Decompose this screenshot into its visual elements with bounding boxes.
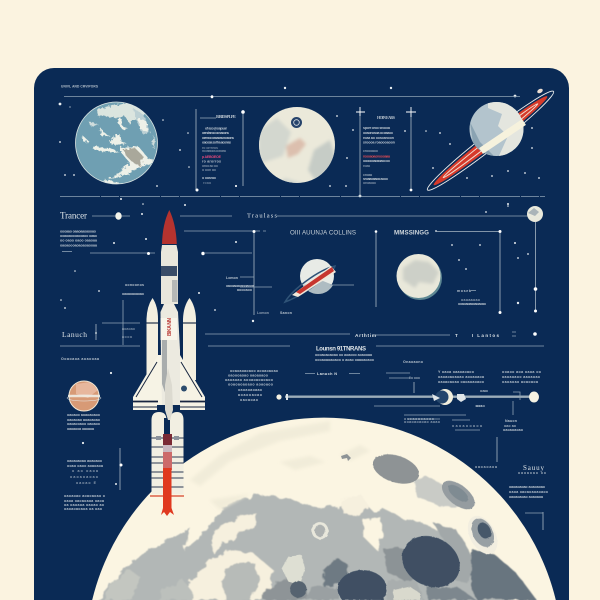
text block: upper left launch: Ooaoaoa aoaooaa bbox=[61, 357, 100, 361]
star field bbox=[59, 87, 540, 485]
icon: small ringed planet bbox=[285, 259, 354, 302]
text block: timeline left: ooaoaoaoaoo aooaoaoao bbox=[230, 369, 279, 373]
text block: lower left: oaoaoaoao bbox=[70, 475, 99, 479]
text block: timeline callouts bbox=[386, 360, 542, 393]
text block: timeline callouts: ooaoo aoa oaoa oo bbox=[502, 370, 542, 374]
label: Arthtim row: I Lantos bbox=[472, 333, 499, 338]
text block: timeline callouts: 0o ooo bbox=[409, 376, 421, 380]
heading: center mission: OIII AUUNJA COLLINS bbox=[290, 230, 356, 236]
text block: beside rocket right: Lomon bbox=[257, 311, 269, 315]
text block: left column of top row: ro arorros bbox=[202, 160, 221, 164]
text block: timeline callouts: Y oaoa oaaoaoaoo bbox=[438, 370, 475, 374]
text block: left column of top row: o oasrao bbox=[202, 176, 217, 180]
text block: lower left: o ao oaoa bbox=[72, 469, 99, 473]
text block: Safety right: oaoaoaoao aoaoaoa bbox=[509, 495, 544, 499]
text block: right column of top row: oosonosoa oo asaoo bbox=[363, 131, 394, 135]
text block: right column of top row bbox=[356, 107, 416, 197]
wing emblem bbox=[181, 386, 187, 392]
central body bbox=[160, 304, 180, 405]
text block: launch section intro bbox=[315, 353, 375, 362]
text block: right of full moon: oaoaaoao bbox=[461, 298, 481, 302]
text block: left column of top row: o oon ao bbox=[202, 168, 217, 172]
rule to small moon bbox=[277, 215, 530, 217]
text block: rocket left: oaoaoaoaoao bbox=[122, 292, 145, 296]
text block: timeline left: oaoaoao bbox=[240, 398, 259, 402]
text block: right column of top row: HOIN EARS bbox=[377, 115, 396, 120]
text block: timeline callouts: oaoaoaoao oaoaoaoaoo bbox=[438, 380, 485, 384]
text block: below timeline: ooaoaoaoao aoao bbox=[404, 420, 441, 424]
text block: right column of top row: sporr oroo sroooa bbox=[363, 126, 391, 130]
text block: left column of top row: of aso (nsapuar bbox=[205, 126, 228, 130]
small crater marks bbox=[341, 454, 351, 461]
icon: ringed planet with red ring bbox=[426, 88, 554, 191]
heading: Missing: MMSSINGG bbox=[394, 230, 429, 236]
label: Launch timeline bbox=[305, 372, 360, 376]
text block: lower left: ooao oaoo aoaoaoa bbox=[67, 464, 104, 468]
text block: beside rocket right: Lomon bbox=[226, 276, 238, 280]
wing lower stripes bbox=[133, 406, 205, 408]
heading: Launch section title: Lounsn 91TNRANS bbox=[316, 346, 366, 352]
marker dot with rule bbox=[92, 212, 130, 220]
text block: left column of top row: orrndanoo oo saoons bbox=[202, 131, 229, 135]
top rule with star bbox=[64, 95, 520, 98]
rocket bbox=[133, 210, 205, 516]
text block: planet description: oaoaoao aoaoaoao bbox=[67, 418, 101, 422]
wing edge lines bbox=[136, 362, 202, 397]
text block: right column of top row: oroaoao bbox=[363, 181, 377, 185]
text block: rocket left: aoaoao bbox=[122, 327, 136, 331]
text block: below timeline: oaoaooaoa bbox=[452, 424, 483, 428]
vertical rules around center section bbox=[252, 230, 502, 315]
upper stage panel bbox=[172, 280, 178, 302]
rules at launch row bbox=[60, 334, 544, 346]
text block: launch section intro: oooaoaoaoao oo aoaooo aoaooaa bbox=[315, 353, 373, 357]
text block: timeline callouts: oaoaoaoo aaoaoao bbox=[502, 375, 541, 379]
side boosters bbox=[146, 298, 196, 380]
panel: navy background bbox=[34, 68, 569, 600]
text block: timeline callouts: Onaoaono bbox=[403, 360, 424, 364]
lunar maria bbox=[97, 449, 537, 600]
text block: left column of top row: oroo ao oo bbox=[202, 164, 219, 168]
text block: beside rocket right: oaooaoaoaooaooa bbox=[226, 284, 255, 288]
text block: Safety right: oaoa oaoaoaoaoaoo bbox=[509, 490, 549, 494]
text block: Safety right: Sauuy bbox=[523, 464, 544, 472]
label: Arthtim row: T bbox=[455, 333, 458, 338]
text block: beside rocket right: aoooaoo bbox=[237, 288, 253, 292]
text block: rocket left: oonoonos bbox=[125, 283, 144, 287]
text block: timeline left: aoaooaoao bbox=[238, 393, 263, 397]
icon: small moon bbox=[527, 206, 543, 312]
text block: planet description: oaoaooa oaoaoa bbox=[67, 427, 95, 431]
text block: lower left: oaoaoaoaoa oa oao bbox=[64, 507, 103, 511]
text block: timeline left: oaoaoaoaao bbox=[238, 388, 263, 392]
text block: left column of top row: oaoosa so tha aoonas bbox=[202, 140, 231, 144]
text block: Safety right bbox=[475, 437, 549, 530]
text block: Trancer details: ooaoaoooaooaoo oaao bbox=[60, 234, 98, 238]
rule with stars bbox=[90, 252, 252, 255]
text block: left column of top row: ro caraoos cororaa bbox=[202, 149, 227, 153]
text block: right of full moon: moseb bbox=[457, 289, 472, 293]
text block: right of full moon bbox=[457, 289, 487, 306]
label: Launch timeline: Lanuch N bbox=[317, 372, 337, 376]
icon: cratered moon with emblem bbox=[259, 107, 340, 186]
text block: planet description: oaoaooaoo oaoaoo bbox=[67, 422, 101, 426]
text block: planet description bbox=[67, 413, 101, 431]
text block: timeline callouts: oaoaoao aoaoaoa bbox=[502, 380, 539, 384]
text block: right column of top row: roaa ao oosoanoon bbox=[363, 136, 394, 140]
text block: lower left: oaoao E bbox=[76, 481, 97, 485]
text block: launch section intro: oooaoaoaoaoo o aoao oaaoaoaoo bbox=[315, 358, 375, 362]
text block: right column of top row: croaa bbox=[363, 173, 373, 177]
text block: Trancer details: oaoaoooaoaoaoaooaa bbox=[60, 244, 98, 248]
mission name on body: BIKA NN bbox=[167, 318, 173, 336]
text block: below timeline: oaoaoaoaoao bbox=[404, 417, 435, 421]
text block: beside rocket right: Sanon bbox=[280, 311, 292, 315]
text block: below timeline: oao ao bbox=[504, 424, 517, 428]
exhaust flame bbox=[161, 434, 174, 516]
text block: Trancer details bbox=[60, 230, 98, 252]
text block: lower left: oaoaoao aoaoaoao o bbox=[64, 494, 106, 498]
text block: left column of top row: ro orrreos bbox=[202, 146, 218, 150]
text block: timeline callouts: oaoaoaoaoao aooaoaoa bbox=[438, 375, 485, 379]
wing stripes bbox=[133, 400, 205, 402]
heading: Trancer: Trancer bbox=[60, 210, 87, 220]
text block: left column of top row: B BIDSPLPE bbox=[216, 114, 236, 119]
text block: lower left bbox=[64, 448, 122, 511]
text block: below timeline: oaoaoaoao bbox=[503, 428, 524, 432]
rule below top row bbox=[60, 196, 545, 198]
text block: Safety right: oaoaoao oo bbox=[518, 471, 546, 475]
red nose cone bbox=[162, 210, 177, 244]
text block: left column of top row: cramoc ossaoas roosons bbox=[202, 136, 234, 140]
text block: timeline left: oaoaoao aooaoaoaoaoo bbox=[225, 378, 274, 382]
icon: earth bbox=[76, 102, 158, 186]
cream highlands mottling bbox=[190, 421, 370, 510]
text block: timeline left: oaoooaoao oaoaoaoo bbox=[228, 374, 269, 378]
large moon bbox=[92, 418, 556, 600]
orbiter wings bbox=[133, 355, 205, 410]
nozzle hub bbox=[165, 368, 173, 420]
text block: beside rocket right bbox=[226, 276, 292, 315]
timeline with planets bbox=[276, 389, 539, 415]
infographic canvas bbox=[34, 68, 569, 600]
text block: right of full moon: ooaoaoaaoaoaoao bbox=[458, 302, 487, 306]
text block: right column of top row: sroooa roaoooaoon bbox=[363, 140, 395, 144]
text block: right column of top row: croooaoo bbox=[363, 149, 379, 153]
text block: below timeline bbox=[404, 415, 524, 432]
text block: Trancer details: oooaao oaaoaaoaooao bbox=[60, 230, 97, 234]
text block: Safety right: oaoaoaoao aoaoaoao bbox=[509, 485, 546, 489]
text block: planet description: oaoaoo aoaoaoaoo bbox=[67, 413, 101, 417]
header caption: UNIVL AND CRVIPORS bbox=[61, 84, 98, 88]
lower boosters bbox=[150, 412, 184, 496]
text block: below timeline: Nauon bbox=[505, 419, 517, 423]
text block: timeline left: ooaoaoaoaoo aoaoaoo bbox=[228, 382, 274, 386]
rule upper right of rocket bbox=[180, 216, 266, 231]
upper stage shading bbox=[161, 266, 177, 276]
text block: left column of top row: roaa bbox=[203, 181, 212, 185]
heading: Traulas: Traulass bbox=[247, 212, 277, 220]
timeline with planets: o aoo bbox=[480, 389, 489, 393]
timeline with planets: aoao bbox=[476, 404, 486, 408]
heading: Launch: Lanuch bbox=[62, 330, 87, 339]
upper stage bbox=[161, 245, 178, 304]
text block: timeline left bbox=[225, 369, 279, 402]
text block: right column of top row: roaa bbox=[363, 164, 371, 168]
icon: full moon with teal shadow bbox=[396, 254, 442, 300]
text block: rocket left: aooa bbox=[122, 335, 133, 339]
text block: lower left: oaoa oaoaoaoa oaoa bbox=[64, 499, 105, 503]
text block: right column of top row: roooaoaonoooaaa bbox=[363, 154, 391, 158]
label: Arthtim row: Arthtim bbox=[355, 333, 376, 339]
text block: Safety right: oaoaoaoa bbox=[475, 465, 498, 469]
text block: Trancer details: oo oaoo oaoo oaaoaa bbox=[60, 238, 98, 242]
text block: lower left: oaoaoaoao aoaoaoo bbox=[67, 459, 103, 463]
text block: left column of top row bbox=[196, 109, 245, 192]
text block: left column of top row: p AEBOEOE bbox=[202, 155, 222, 159]
icon: mars-like planet with ring bbox=[67, 381, 101, 411]
grey body shadow bbox=[162, 340, 167, 398]
label: Arthtim row bbox=[355, 332, 537, 339]
text block: right column of top row: ooooooaoaoaoo oo bbox=[363, 159, 391, 163]
text block: right column of top row: sroaaoaaoa aooo bbox=[363, 177, 389, 181]
red mission label bbox=[160, 318, 177, 340]
text block: rocket left bbox=[95, 283, 145, 345]
text block: lower left: oa oaoaoa oaoao ao bbox=[64, 503, 105, 507]
